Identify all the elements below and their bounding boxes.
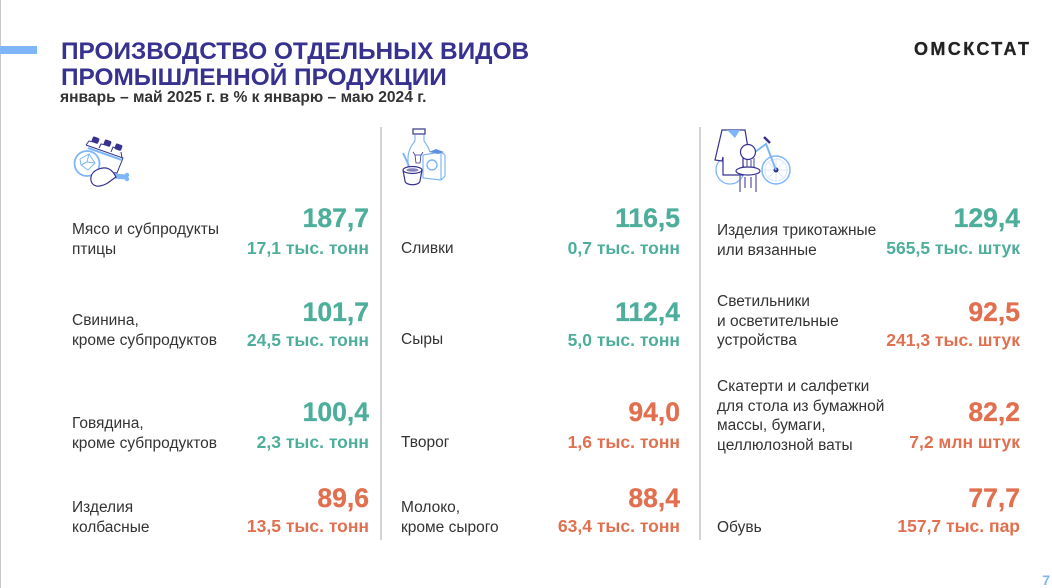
label: tablecloths: Скатерти и салфетки bbox=[717, 378, 869, 395]
label: sausage bbox=[72, 499, 150, 536]
label: poultry: птицы bbox=[72, 240, 116, 258]
volume: beef: 2,3 тыс. тонн bbox=[257, 432, 369, 452]
icon: meat and poultry bbox=[74, 136, 130, 187]
label: beef: Говядина, bbox=[72, 415, 144, 432]
label: milk: Молоко, bbox=[401, 499, 460, 516]
value: sausage: 89,6 bbox=[317, 483, 369, 513]
value: cottage cheese: 94,0 bbox=[628, 397, 680, 427]
label: cottage cheese: Творог bbox=[401, 434, 449, 451]
value: cream: 116,5 bbox=[615, 203, 680, 233]
value: knitwear: 129,4 bbox=[954, 203, 1020, 233]
label: lighting bbox=[717, 293, 839, 349]
volume: footwear: 157,7 тыс. пар bbox=[897, 516, 1020, 536]
volume: knitwear: 565,5 тыс. штук bbox=[886, 238, 1020, 258]
label: sausage: колбасные bbox=[72, 518, 150, 536]
value: poultry: 187,7 bbox=[303, 203, 369, 233]
accent bar bbox=[0, 46, 37, 54]
logo: Omskstat: ОМСКСТАТ bbox=[914, 39, 1031, 59]
volume: cream: 0,7 тыс. тонн bbox=[568, 238, 680, 258]
label: cheese: Сыры bbox=[401, 331, 443, 348]
label: lighting: устройства bbox=[717, 332, 797, 349]
value: tablecloths: 82,2 bbox=[968, 397, 1020, 427]
value: milk: 88,4 bbox=[628, 483, 680, 513]
label: knitwear bbox=[717, 222, 876, 258]
icon: knitwear, chair and bicycle bbox=[714, 129, 791, 192]
label: tablecloths: для стола из бумажной bbox=[717, 398, 884, 414]
volume: tablecloths: 7,2 млн штук bbox=[909, 432, 1020, 452]
label: knitwear: или вязанные bbox=[717, 242, 817, 258]
label: milk bbox=[401, 499, 499, 536]
label: beef bbox=[72, 415, 217, 452]
label: poultry bbox=[72, 221, 219, 258]
icon: dairy products bbox=[402, 128, 446, 186]
volume: cottage cheese: 1,6 тыс. тонн bbox=[568, 432, 680, 452]
label: milk: кроме сырого bbox=[401, 518, 499, 536]
value: pork: 101,7 bbox=[303, 297, 369, 327]
label: tablecloths bbox=[717, 378, 884, 454]
value: beef: 100,4 bbox=[303, 397, 369, 427]
label: tablecloths: массы, бумаги, bbox=[717, 417, 826, 434]
title: ПРОМЫШЛЕННОЙ ПРОДУКЦИИ bbox=[61, 64, 447, 91]
value: footwear: 77,7 bbox=[968, 483, 1020, 513]
label: knitwear: Изделия трикотажные bbox=[717, 222, 876, 239]
page number: 7 bbox=[1042, 572, 1050, 588]
label: tablecloths: целлюлозной ваты bbox=[717, 436, 853, 454]
label: footwear: Обувь bbox=[717, 519, 762, 536]
value: lighting: 92,5 bbox=[968, 297, 1020, 327]
volume: sausage: 13,5 тыс. тонн bbox=[247, 516, 369, 536]
title: ПРОИЗВОДСТВО ОТДЕЛЬНЫХ ВИДОВ bbox=[61, 38, 529, 65]
label: pork bbox=[72, 312, 217, 348]
label: beef: кроме субпродуктов bbox=[72, 434, 217, 452]
label: sausage: Изделия bbox=[72, 499, 133, 516]
subtitle: январь – май 2025 г. в % к январю – маю 2024 г. bbox=[60, 89, 427, 106]
label: pork: кроме субпродуктов bbox=[72, 332, 217, 348]
volume: pork: 24,5 тыс. тонн bbox=[247, 330, 369, 350]
volume: poultry: 17,1 тыс. тонн bbox=[247, 238, 369, 258]
volume: milk: 63,4 тыс. тонн bbox=[558, 516, 680, 536]
label: cream: Сливки bbox=[401, 240, 454, 257]
label: poultry: Мясо и субпродукты bbox=[72, 221, 219, 238]
value: cheese: 112,4 bbox=[615, 297, 680, 327]
volume: lighting: 241,3 тыс. штук bbox=[886, 330, 1020, 350]
label: lighting: и осветительные bbox=[717, 312, 839, 330]
title bbox=[61, 38, 529, 91]
volume: cheese: 5,0 тыс. тонн bbox=[568, 330, 680, 350]
label: pork: Свинина, bbox=[72, 312, 139, 329]
label: lighting: Светильники bbox=[717, 293, 810, 310]
